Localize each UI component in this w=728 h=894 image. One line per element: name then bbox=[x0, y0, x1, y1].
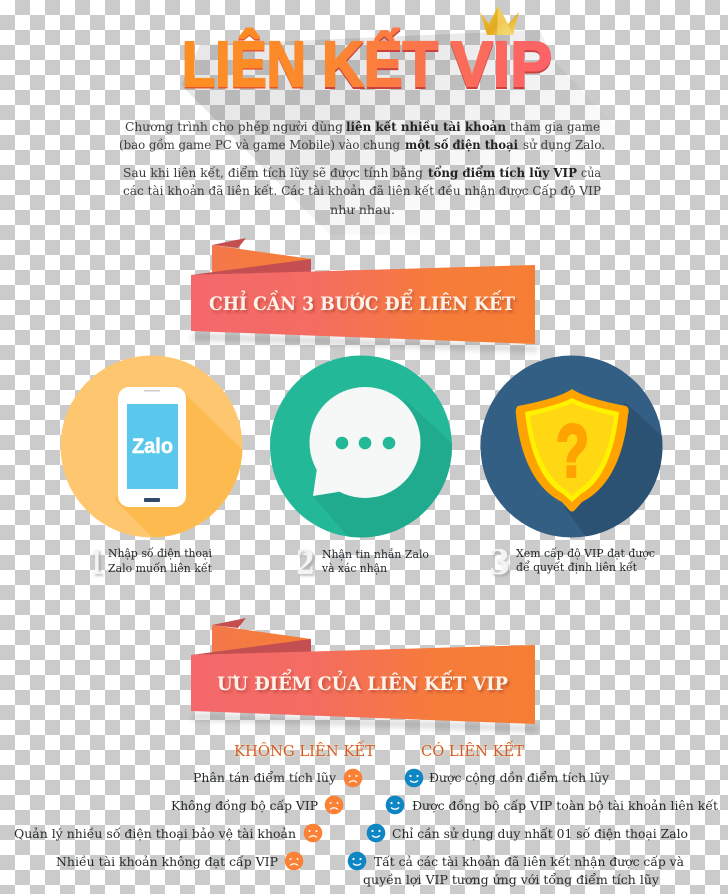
intro paragraph 1: tham gia game bbox=[510, 119, 600, 134]
banner: steps heading bbox=[190, 238, 540, 352]
column heading: with link: CÓ LIÊN KẾT bbox=[421, 740, 524, 760]
step 3 icon: shield with question mark bbox=[480, 356, 668, 545]
column: without link items: Nhiều tài khoản không đạt cấp VIP bbox=[56, 854, 278, 869]
column: with link items: Chỉ cần sử dụng duy nhất 01 số điện thoại Zalo bbox=[392, 826, 688, 841]
intro paragraph 2 bbox=[123, 165, 601, 217]
title word: LIÊN: LIÊN bbox=[182, 27, 306, 100]
intro paragraph 1: sử dụng Zalo. bbox=[523, 137, 605, 152]
step 2 label: và xác nhận bbox=[321, 561, 388, 575]
step 2 label: Nhận tin nhắn Zalo bbox=[322, 547, 429, 561]
icon: happy face bbox=[348, 852, 366, 870]
column: without link items: Quản lý nhiều số điện thoại bảo vệ tài khoản bbox=[14, 826, 296, 841]
icon: happy face bbox=[386, 796, 404, 814]
step 3 label: để quyết định liên kết bbox=[516, 560, 637, 574]
column: with link items: Được cộng dồn điểm tích lũy bbox=[429, 770, 610, 785]
column: with link items: Được đồng bộ cấp VIP toàn bộ tài khoản liên kết bbox=[412, 798, 718, 813]
step 3 label bbox=[489, 543, 655, 583]
icon: crown bbox=[480, 6, 519, 35]
banner text: ƯU ĐIỂM CỦA LIÊN KẾT VIP bbox=[217, 668, 508, 695]
intro paragraph 2: Sau khi liên kết, điểm tích lũy sẽ được tính bằng bbox=[123, 165, 423, 180]
title: Liên kết VIP bbox=[182, 27, 552, 100]
intro paragraph 1: Chương trình cho phép người dùng bbox=[125, 119, 343, 134]
banner text: CHỈ CẦN 3 BƯỚC ĐỂ LIÊN KẾT bbox=[209, 288, 515, 315]
title long shadow bbox=[181, 30, 650, 235]
question mark: ? bbox=[556, 410, 589, 492]
intro paragraph 2: các tài khoản đã liên kết. Các tài khoản đã liên kết đều nhận được Cấp độ VIP bbox=[123, 183, 601, 198]
intro paragraph 1: (bao gồm game PC và game Mobile) vào chung bbox=[119, 137, 400, 152]
intro paragraph 2: tổng điểm tích lũy VIP bbox=[428, 165, 578, 180]
column heading: without link: KHÔNG LIÊN KẾT bbox=[234, 740, 375, 760]
Zalo logo text: Zalo bbox=[132, 435, 173, 458]
intro paragraph 2: của bbox=[581, 165, 601, 180]
column: with link items: quyền lợi VIP tương ứng với tổng điểm tích lũy bbox=[363, 872, 660, 887]
column: without link items: Không đồng bộ cấp VIP bbox=[171, 798, 318, 813]
step 2 icon: chat bubble bbox=[270, 356, 462, 545]
icon: happy face bbox=[405, 769, 423, 787]
icon: sad face bbox=[304, 824, 322, 842]
icon: sad face bbox=[344, 769, 362, 787]
title word: VIP: VIP bbox=[451, 28, 552, 100]
banner: benefits heading bbox=[190, 618, 540, 732]
intro paragraph 1: liên kết nhiều tài khoản bbox=[346, 119, 506, 134]
icon: happy face bbox=[367, 824, 385, 842]
step 1 icon: phone with Zalo bbox=[60, 356, 242, 538]
intro paragraph 2: như nhau. bbox=[330, 202, 395, 217]
intro paragraph 1 bbox=[119, 119, 605, 152]
icon: sad face bbox=[325, 796, 343, 814]
step 3 label: Xem cấp độ VIP đạt được bbox=[516, 546, 655, 560]
column: with link items: Tất cả các tài khoản đã liên kết nhận được cấp và bbox=[374, 854, 685, 869]
step 1 label bbox=[90, 543, 212, 583]
step 1 label: Zalo muốn liên kết bbox=[108, 561, 212, 575]
icon: sad face bbox=[285, 852, 303, 870]
intro paragraph 1: một số điện thoại bbox=[405, 137, 518, 152]
column: with link items bbox=[348, 769, 718, 887]
step 2 label bbox=[296, 543, 429, 583]
column: without link items: Phân tán điểm tích lũy bbox=[193, 770, 337, 785]
title word: KẾT: KẾT bbox=[322, 28, 438, 100]
column: without link items bbox=[14, 769, 362, 870]
step number 2: 2 bbox=[296, 543, 315, 583]
step number 3: 3 bbox=[489, 543, 510, 583]
step 1 label: Nhập số điện thoại bbox=[108, 546, 212, 560]
step number 1: 1 bbox=[90, 543, 103, 583]
